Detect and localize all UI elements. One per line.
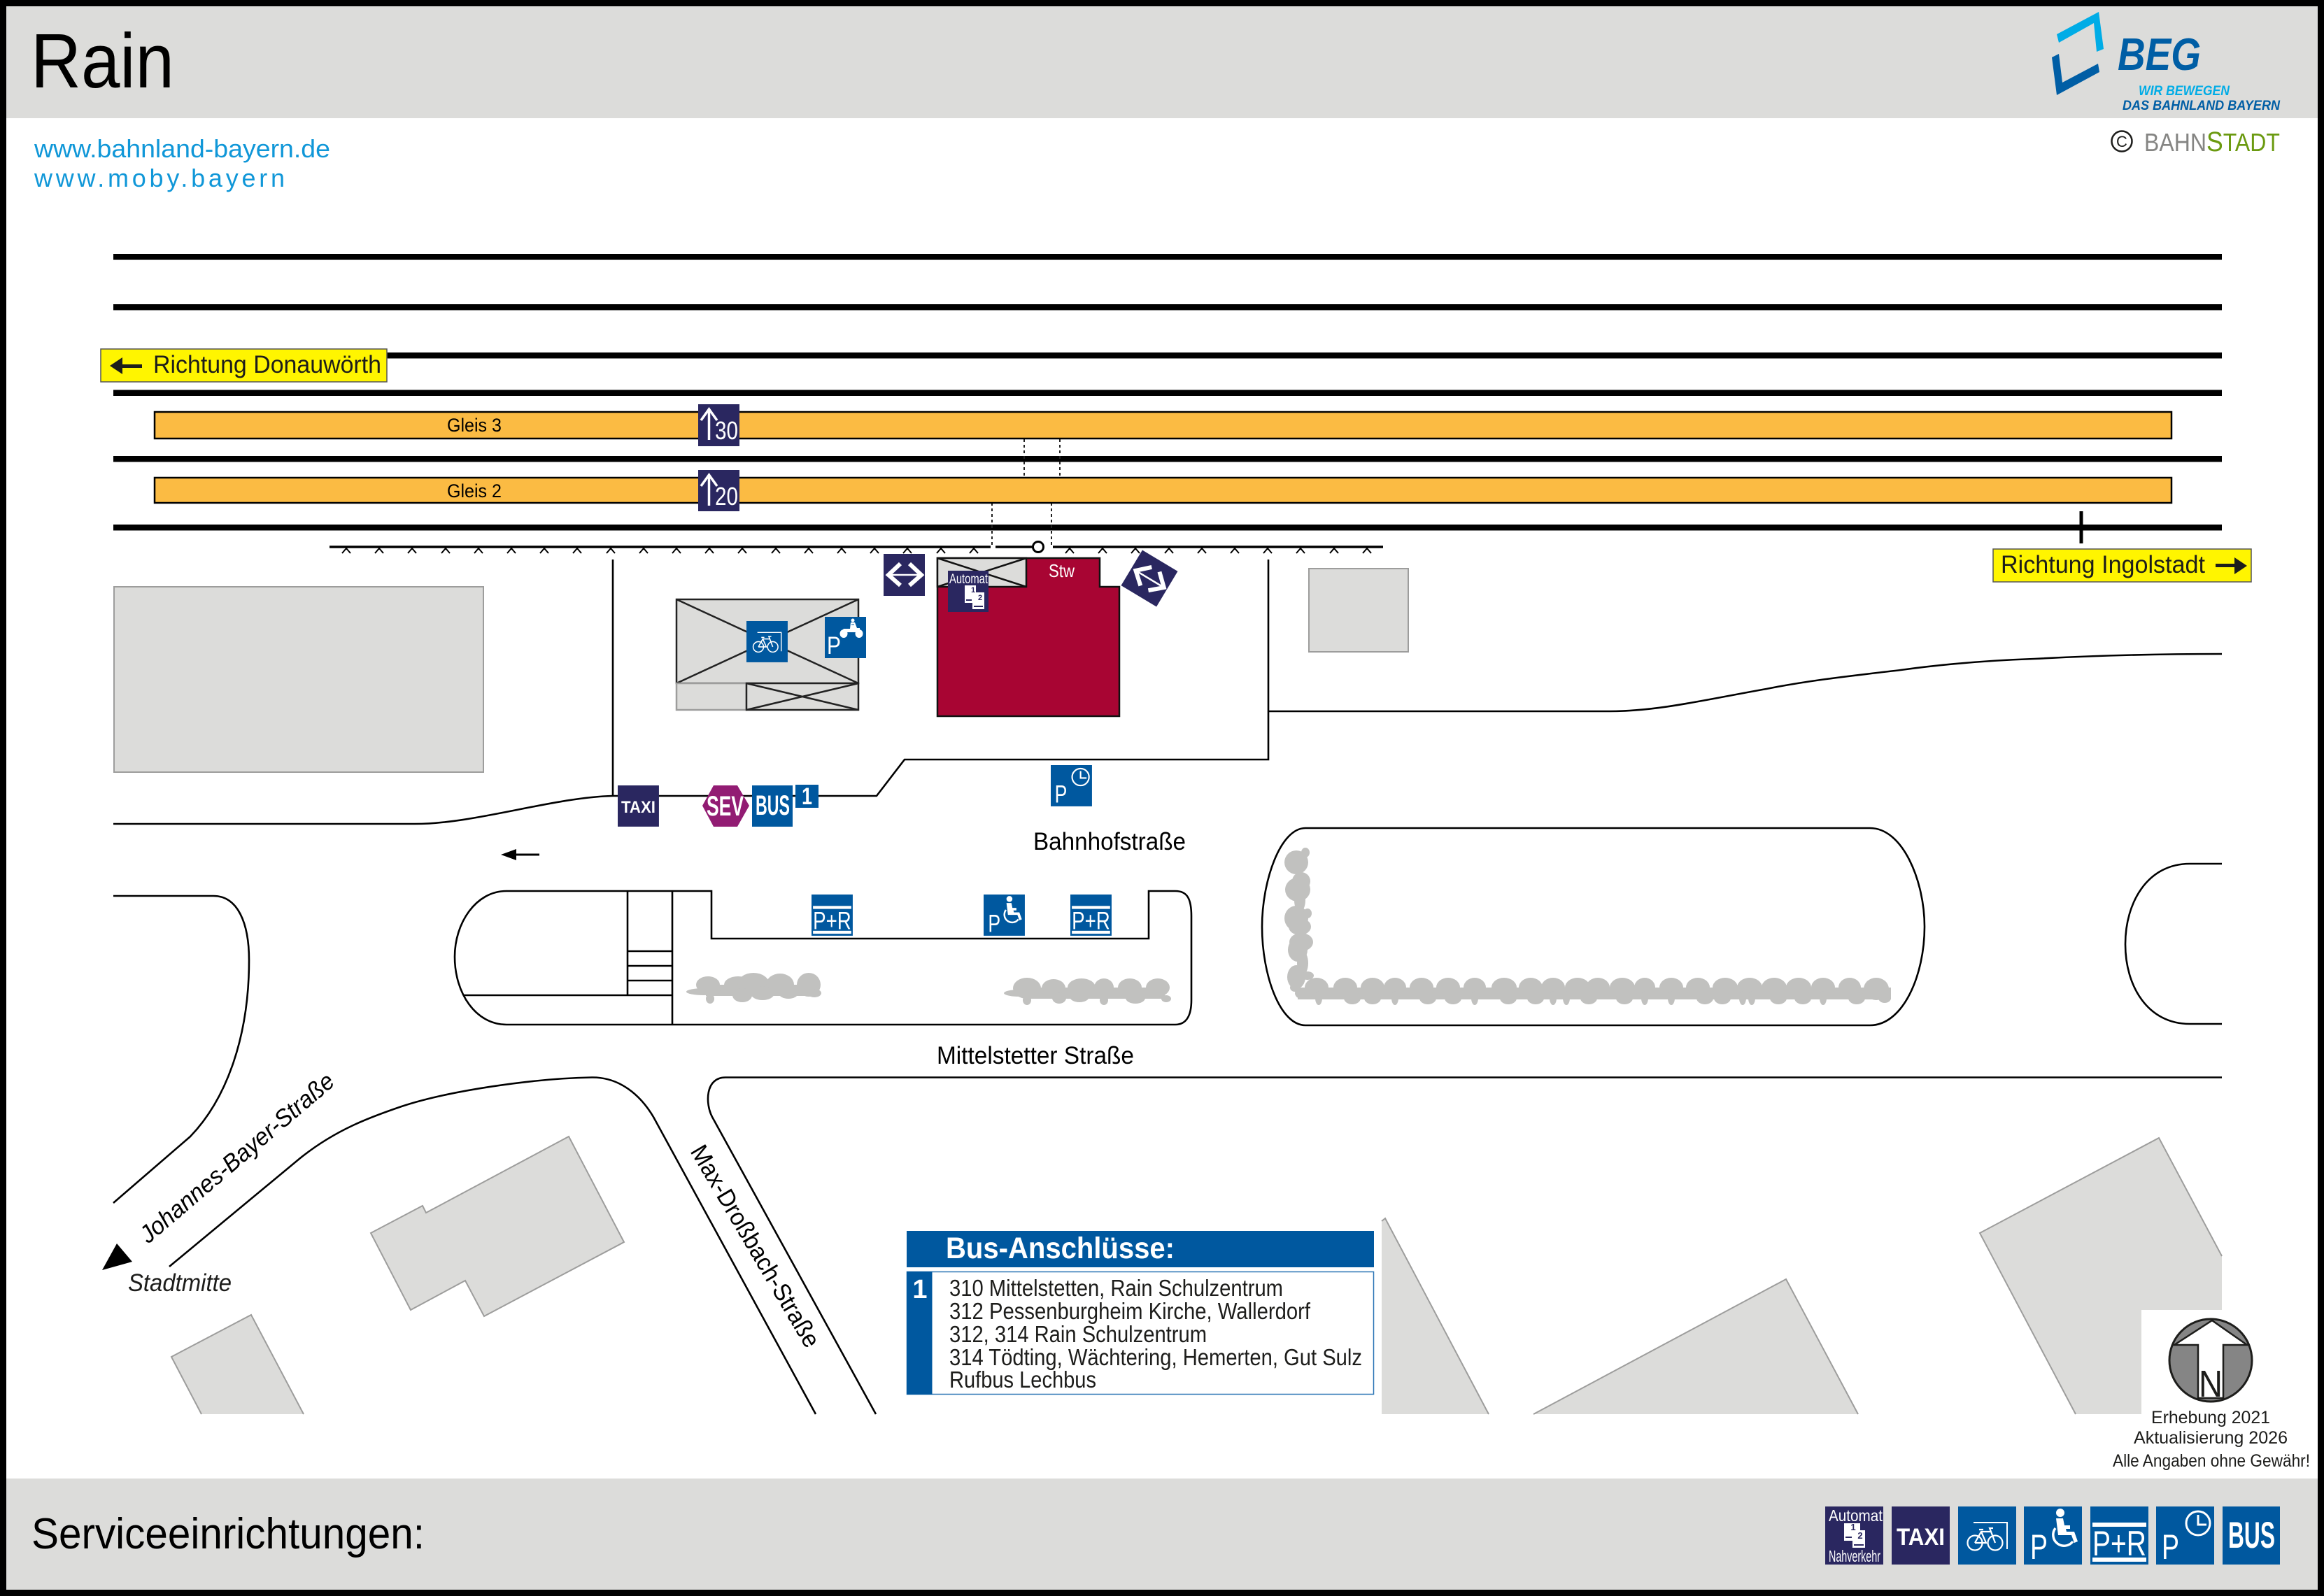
icon: north arrow: [2169, 1319, 2252, 1405]
icon: bus stop: BUS: [756, 790, 790, 821]
station building: [937, 558, 1119, 716]
icon: short-stay parking: [1051, 765, 1092, 808]
legend: park and ride: [2090, 1506, 2148, 1565]
hedges: [686, 848, 1891, 1005]
icon: accessible parking: P: [988, 909, 1000, 937]
heading: Bus-Anschlüsse: [907, 1231, 1374, 1267]
icon: park and ride 2: P+R: [1072, 907, 1110, 935]
legend: park and ride: P+R: [2092, 1524, 2146, 1563]
icon: ticket machine: 1: [971, 586, 975, 594]
dashed platform access: [992, 439, 1060, 547]
direction marker: Stadtmitte: Stadtmitte: [128, 1269, 232, 1297]
street label: Max-Droßbach-Straße: Max-Droßbach-Straße: [685, 1140, 826, 1353]
fence: [330, 541, 1383, 553]
icon: accessible parking: [984, 895, 1025, 937]
heading: Bus-Anschlüsse: Bus-Anschlüsse:: [946, 1232, 1175, 1265]
icon: taxi: TAXI: [621, 798, 656, 817]
icon: bicycle parking: [746, 621, 788, 662]
copyright BahnStadt: BAHNSTADT: [2144, 127, 2280, 157]
legend: ticket machine: [1825, 1506, 1883, 1565]
legend: ticket machine: Automat: [1829, 1506, 1883, 1525]
header band: [6, 6, 2318, 118]
copyright BahnStadt: C: [2116, 133, 2127, 150]
icon: north arrow: N: [2199, 1363, 2223, 1405]
signal post on track: [2079, 511, 2083, 543]
icon: bus stop: [752, 785, 793, 827]
icon: taxi: [618, 785, 659, 827]
direction sign: Ingolstadt: [1993, 549, 2251, 582]
street label: Johannes-Bayer-Straße: Johannes-Bayer-Straße: [134, 1067, 340, 1249]
platform: Gleis 2: Gleis 2: [447, 480, 502, 501]
website links: www.moby.bayern: [34, 164, 285, 192]
icon: ticket machine: 2: [978, 594, 982, 602]
legend: ticket machine: Nahverkehr: [1829, 1547, 1880, 1565]
large traffic island: [1262, 828, 1925, 1025]
icon: stairs 30 m: [698, 404, 739, 446]
legend: bus: BUS: [2228, 1515, 2275, 1556]
icon: stairs 20 m: 20: [715, 482, 738, 511]
platform: Gleis 2: [155, 478, 2171, 503]
logo: BEG: WIR BEWEGEN: [2139, 84, 2230, 99]
direction sign: Ingolstadt: Richtung Ingolstadt: [2001, 551, 2205, 578]
logo: BEG: BEG: [2118, 29, 2201, 80]
bus lines list: 1: [912, 1275, 928, 1304]
bus stop number 1: [795, 783, 819, 810]
building: bicycle shelter: [676, 599, 858, 710]
website links: [34, 134, 330, 192]
station building: Stw: [1049, 560, 1075, 581]
legend: taxi: TAXI: [1897, 1524, 1945, 1551]
bus lines list: 312, 314 Rain Schulzentrum: [949, 1321, 1207, 1347]
footer band: [6, 1479, 2318, 1590]
legend: taxi: [1892, 1506, 1950, 1565]
bus lines list: 310 Mittelstetten, Rain Schulzentrum: [949, 1275, 1283, 1301]
road outlines: [113, 560, 2222, 1414]
icon: stairs 30 m: 30: [715, 416, 738, 445]
survey notes: Erhebung 2021: [2151, 1408, 2270, 1427]
legend: short-stay parking: P: [2162, 1527, 2179, 1567]
icon: SEV hexagon: [702, 785, 749, 827]
logo: BEG: [2052, 12, 2281, 113]
title: Rain: [31, 18, 174, 104]
legend icons: [1825, 1506, 2280, 1567]
railway tracks: [113, 254, 2222, 530]
legend: short-stay parking: [2156, 1506, 2214, 1567]
one-way arrow: [501, 849, 539, 860]
direction sign: Donauwörth: Richtung Donauwörth: [153, 351, 381, 378]
bus lines list: [907, 1271, 1374, 1395]
street label: Bahnhofstraße: Bahnhofstraße: [1033, 828, 1186, 855]
panel: bus connections: [907, 1231, 1374, 1395]
icon: rotated arrow sign: [1121, 550, 1177, 606]
icon: park and ride 1: P+R: [813, 907, 851, 935]
legend: ticket machine: 1: [1850, 1522, 1856, 1532]
bus stop number 1: 1: [802, 783, 812, 810]
icon: motorcycle parking: P: [827, 632, 841, 660]
icon: SEV hexagon: SEV: [707, 791, 744, 822]
icon: ticket machine: [948, 571, 989, 612]
direction marker: Stadtmitte: [102, 1244, 232, 1297]
survey notes: Aktualisierung 2026: [2134, 1428, 2288, 1448]
footer heading: Serviceeinrichtungen:: [31, 1510, 425, 1558]
legend: accessible parking: [2024, 1506, 2082, 1567]
legend: bicycle parking: [1958, 1506, 2016, 1565]
bus lines list: Rufbus Lechbus: [949, 1367, 1096, 1392]
legend: accessible parking: P: [2030, 1527, 2048, 1567]
traffic island with parking: [455, 891, 1191, 1025]
icon: motorcycle parking: [825, 617, 866, 660]
bus lines list: 312 Pessenburgheim Kirche, Wallerdorf: [949, 1298, 1311, 1324]
icon: underpass arrow: [884, 554, 925, 596]
platform: Gleis 3: Gleis 3: [447, 415, 502, 436]
legend: bus: [2223, 1506, 2280, 1565]
icon: short-stay parking: P: [1055, 780, 1067, 808]
icon: stairs 20 m: [698, 470, 739, 511]
street label: Mittelstetter Straße: Mittelstetter Straße: [937, 1042, 1134, 1069]
platform: Gleis 3: [155, 412, 2171, 439]
buildings: grey surroundings: [114, 569, 2222, 1414]
icon: park and ride 1: [812, 895, 853, 936]
logo: BEG: DAS BAHNLAND BAYERN: [2123, 99, 2281, 113]
legend: ticket machine: 2: [1857, 1530, 1863, 1541]
icon: ticket machine: Automat: [949, 572, 989, 587]
icon: park and ride 2: [1070, 895, 1112, 936]
bus lines list: 314 Tödting, Wächtering, Hemerten, Gut Sulz: [949, 1344, 1362, 1370]
direction sign: Donauwörth: [101, 349, 387, 382]
website links: www.bahnland-bayern.de: [34, 134, 330, 163]
survey notes: [2113, 1408, 2310, 1471]
